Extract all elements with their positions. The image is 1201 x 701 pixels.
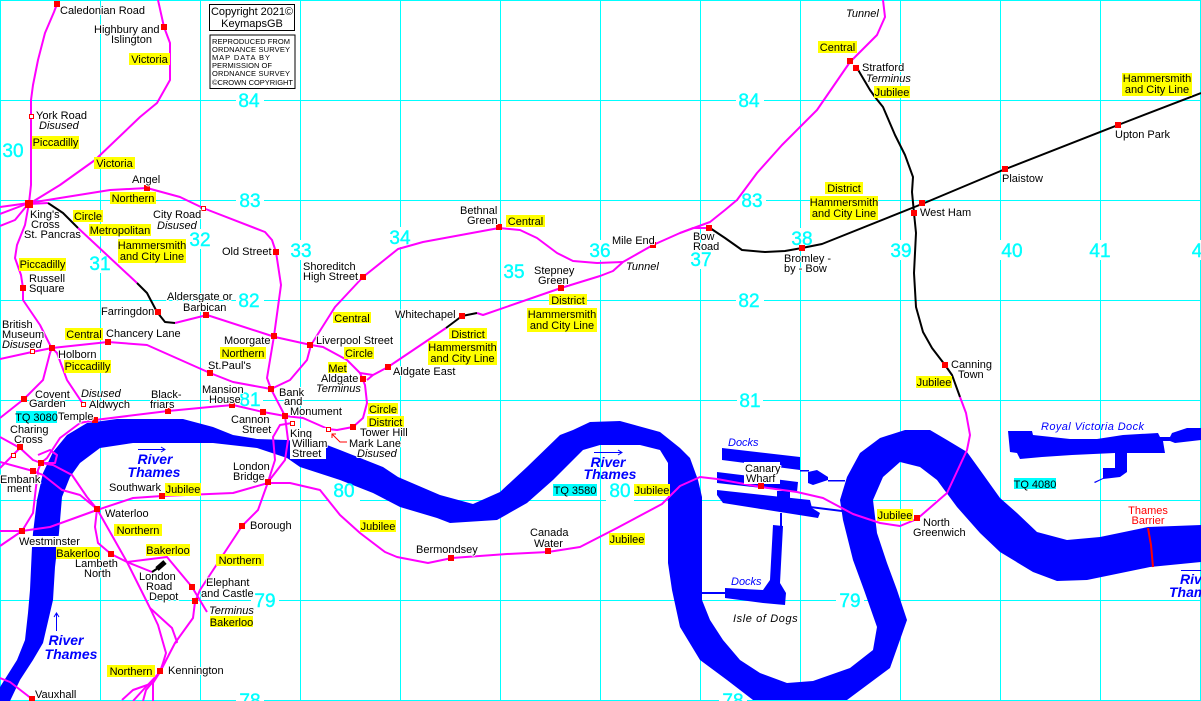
station: Highbury and Islington: [94, 24, 167, 46]
label: Royal Victoria Dock: Royal Victoria Dock: [1041, 421, 1144, 433]
line label: Jubilee: Jubilee: [917, 377, 951, 389]
line label: Hammersmith and City Line: and City Line: [812, 208, 876, 220]
station: Mansion House: [202, 384, 244, 408]
grid numbers: 83: [239, 191, 261, 212]
station: Elephant and Castle: [189, 577, 254, 617]
line label: Jubilee: Jubilee: [610, 534, 644, 546]
tube lines: black sections: [48, 68, 1201, 572]
station: Canning Town: Canning: [951, 359, 992, 371]
station: Aldersgate or Barbican: [167, 291, 233, 318]
line label: Bakerloo: Bakerloo: [146, 545, 190, 557]
grid numbers: 84: [238, 91, 260, 112]
ordnance survey credit: PERMISSION OF: [212, 61, 272, 70]
line label: Hammersmith and City Line: Hammersmith: [118, 240, 186, 252]
station: Elephant and Castle: Elephant: [206, 577, 249, 589]
line label: Jubilee: Jubilee: [875, 87, 909, 99]
station: Plaistow: Plaistow: [1002, 173, 1043, 185]
station: King's Cross St. Pancras: St. Pancras: [24, 229, 81, 241]
line label: Hammersmith and City Line: [428, 341, 497, 365]
station: Whitechapel: Whitechapel: [395, 309, 456, 321]
station: Aldwych: Disused: [81, 388, 122, 400]
label: Thames Barrier: Thames: [1128, 505, 1168, 517]
line label: Hammersmith and City Line: Hammersmith: [528, 309, 596, 321]
station: Bow Road: Road: [693, 241, 719, 253]
river label: River Thames 1: River: [137, 451, 174, 467]
river label: River Thames 3: Thames: [584, 466, 637, 482]
station: Russell Square: Square: [29, 283, 64, 295]
arrow: river flow east 3: [1181, 570, 1201, 572]
station: Stepney Green: [534, 265, 575, 291]
text: London Road Depot: Depot: [149, 591, 178, 603]
grid numbers: 31: [89, 254, 111, 275]
station: Bow Road: Bow: [693, 231, 714, 243]
station: Bethnal Green: Bethnal: [460, 205, 497, 217]
line label: Northern: Northern: [117, 525, 159, 537]
station: Holborn: Holborn: [58, 349, 97, 361]
station: Upton Park: [1115, 122, 1171, 141]
station: London Bridge: Bridge: [233, 471, 265, 483]
ordnance survey credit: ©CROWN COPYRIGHT: [212, 78, 293, 87]
station: London Bridge: [233, 461, 271, 485]
line label: Circle: Circle: [74, 211, 102, 223]
line label: Central: Central: [334, 313, 370, 325]
station: Aldersgate or Barbican: Aldersgate or: [167, 291, 233, 303]
text: London Road Depot: Road: [146, 581, 172, 593]
river label: River Thames 2: River: [48, 632, 85, 648]
station: Stepney Green: Green: [538, 275, 569, 287]
line label: Circle: Circle: [345, 348, 373, 360]
station: Bermondsey: Bermondsey: [416, 544, 478, 556]
station: Shoreditch High Street: [303, 261, 366, 283]
station: Aldersgate or Barbican: Barbican: [183, 302, 226, 314]
station: Bank and Monument: Monument: [290, 406, 342, 418]
grid numbers: 41: [1089, 241, 1111, 262]
line label: Central: Central: [820, 42, 855, 54]
station: disused marker: [12, 454, 16, 458]
grid numbers: 81: [739, 391, 761, 412]
station: Shoreditch High Street: High Street: [303, 271, 358, 283]
station: Canary Wharf: Wharf: [746, 473, 776, 485]
grid reference: TQ 4080: TQ 4080: [1014, 479, 1056, 491]
ordnance survey credit: MAP DATA BY: [212, 53, 270, 62]
station: Mansion House: Mansion: [202, 384, 244, 396]
river label: River Thames 2: Thames: [45, 646, 98, 662]
line label: Hammersmith and City Line: Hammersmith: [428, 342, 497, 354]
line label: Central: Central: [66, 329, 102, 341]
station: Stratford: Terminus: [866, 73, 911, 85]
station: Covent Garden: Covent: [35, 389, 70, 401]
ordnance survey credit: ORDNANCE SURVEY: [212, 69, 290, 78]
grid numbers: 33: [290, 241, 312, 262]
station: Embankment: ment: [7, 483, 31, 495]
line label: Hammersmith and City Line: and City Line: [530, 320, 594, 332]
station: Stepney Green: Stepney: [534, 265, 575, 277]
grid numbers: 37: [690, 250, 712, 271]
station: Tower Hill: [350, 424, 408, 439]
copyright box: Copyright 2021©: [211, 6, 293, 18]
grid numbers: 35: [503, 262, 525, 283]
station: Plaistow: [1002, 166, 1043, 185]
station: Caledonian Road: Caledonian Road: [60, 5, 145, 17]
station: York Road: York Road: [36, 110, 87, 122]
station: British Museum: Disused: [2, 339, 43, 351]
station: Aldwych: [81, 388, 130, 411]
label: Thames Barrier: Barrier: [1131, 515, 1165, 527]
station: Bethnal Green: Green: [467, 215, 498, 227]
station: Old Street: Old Street: [222, 246, 272, 258]
station: Blackfriars: Black-: [151, 389, 182, 401]
station: Lambeth North: North: [84, 568, 111, 580]
station: Tower Hill: Tower Hill: [360, 427, 408, 439]
station: Bank and Monument: Bank: [279, 387, 305, 399]
station: King's Cross St. Pancras: King's: [30, 209, 60, 221]
station: King's Cross St. Pancras: Cross: [31, 219, 60, 231]
station: Lambeth North: [75, 551, 118, 580]
station: Charing Cross: Charing: [10, 424, 49, 436]
copyright box: KeymapsGB: [221, 18, 283, 30]
station: West Ham: West Ham: [920, 207, 971, 219]
grid numbers: 40: [1001, 241, 1023, 262]
line label: Hammersmith and City Line: [118, 239, 186, 263]
line label: District: District: [451, 329, 485, 341]
station: Embankment: [0, 460, 44, 495]
grid numbers: 34: [389, 228, 411, 249]
station: British Museum: [2, 319, 44, 354]
line label: Circle: Circle: [369, 404, 397, 416]
river label: River Thames 3: River: [590, 454, 627, 470]
station: North Greenwich: North: [923, 517, 950, 529]
line label: Hammersmith and City Line: Hammersmith: [810, 197, 878, 209]
note: Tunnel north: Tunnel: [846, 8, 879, 20]
line label: Victoria: Victoria: [131, 54, 169, 66]
station: York Road: [30, 110, 87, 132]
station: Bromley-by-Bow: [784, 245, 831, 275]
station: Canada Water: Canada: [530, 527, 569, 539]
station: Canada Water: [530, 527, 569, 554]
station: North Greenwich: [913, 515, 966, 539]
line label: Hammersmith and City Line: Hammersmith: [1123, 73, 1191, 85]
station: Covent Garden: [21, 389, 70, 410]
dock: Royal Victoria Dock: [1008, 428, 1201, 483]
station: Westminster: [19, 528, 81, 548]
line label: District: District: [827, 183, 861, 195]
station: Aldgate: Aldgate: [321, 373, 358, 385]
station: Bethnal Green: [460, 205, 502, 230]
line label: District: District: [369, 417, 402, 429]
station: Liverpool Street: Liverpool Street: [316, 335, 393, 347]
station: Highbury and Islington: Islington: [111, 34, 152, 46]
line label: Northern: Northern: [110, 666, 152, 678]
line label: District: District: [551, 295, 585, 307]
line label: Jubilee: Jubilee: [166, 484, 200, 496]
grid numbers: 84: [738, 91, 760, 112]
station: Aldgate East: Aldgate East: [393, 366, 455, 378]
station: City Road: Disused: [157, 220, 198, 232]
station: York Road: Disused: [39, 120, 80, 132]
station: Bank and Monument: [268, 386, 342, 419]
station: Covent Garden: Garden: [29, 398, 66, 410]
station: Borough: Borough: [250, 520, 292, 532]
station: Elephant and Castle: and Castle: [201, 588, 254, 600]
station: Angel: Angel: [132, 174, 160, 186]
note: Tunnel Mile End: Tunnel: [626, 261, 659, 273]
line label: Piccadilly: Piccadilly: [65, 361, 111, 373]
line label: Hammersmith and City Line: and City Line: [1125, 84, 1189, 96]
line label: Northern: Northern: [222, 348, 264, 360]
ordnance survey credit: REPRODUCED FROM: [212, 37, 290, 46]
station: King William Street: Street: [292, 448, 321, 460]
station: Temple: Temple: [58, 411, 93, 423]
station: Vauxhall: Vauxhall: [35, 689, 76, 701]
grid numbers: 80: [333, 481, 355, 502]
station: North Greenwich: Greenwich: [913, 527, 966, 539]
station: Russell Square: [20, 273, 65, 295]
line label: Northern: Northern: [219, 555, 261, 567]
station: City Road: City Road: [153, 209, 201, 221]
grid numbers: 30: [2, 141, 24, 162]
line label: Northern: Northern: [112, 193, 154, 205]
grid numbers: 36: [589, 241, 611, 262]
station: Mark Lane: Disused: [357, 448, 398, 460]
grid numbers: 32: [189, 230, 211, 251]
grid numbers: 83: [741, 191, 763, 212]
river label: River Thames 4: [1169, 571, 1201, 600]
station: Southwark: Southwark: [109, 482, 161, 494]
station: Aldwych: Aldwych: [89, 399, 130, 411]
station: London Bridge: London: [233, 461, 270, 473]
station: King William Street: King: [290, 428, 312, 440]
line label: Hammersmith and City Line: and City Line: [430, 353, 495, 365]
station: Elephant and Castle: Terminus: [209, 605, 254, 617]
line label: Bakerloo: Bakerloo: [210, 617, 253, 629]
line label: Hammersmith and City Line: [810, 196, 878, 220]
line label: Piccadilly: Piccadilly: [20, 259, 66, 271]
line label: Hammersmith and City Line: and City Line: [120, 251, 184, 263]
label: Docks: Docks: [728, 437, 759, 449]
line label: Bakerloo: Bakerloo: [56, 548, 100, 560]
station: British Museum: British: [2, 319, 33, 331]
arrow: Mark Lane pointer: [332, 434, 347, 442]
station: Cannon Street: [231, 409, 271, 436]
station: Canary Wharf: Canary: [745, 463, 781, 475]
station: St Paul's: St.Paul's: [208, 360, 252, 372]
text: London Road Depot: [139, 571, 178, 603]
ordnance survey credit: [210, 35, 295, 88]
station: Aldgate: Terminus: [316, 383, 361, 395]
station: Russell Square: Russell: [29, 273, 65, 285]
station: City Road: [153, 206, 206, 232]
station: Embankment: Embank: [0, 474, 41, 486]
text: London Road Depot: London: [139, 571, 176, 583]
line label: Jubilee: Jubilee: [361, 521, 395, 533]
station: Chancery Lane: Chancery Lane: [106, 328, 181, 340]
thames barrier: [1148, 528, 1153, 567]
station: British Museum: Museum: [2, 329, 44, 341]
station: Farringdon: Farringdon: [101, 306, 154, 318]
station: Canada Water: Water: [534, 538, 563, 550]
line label: Piccadilly: Piccadilly: [33, 137, 79, 149]
line label: Victoria: Victoria: [96, 158, 134, 170]
station: Chancery Lane: [105, 328, 181, 345]
station: West Ham: [911, 200, 971, 219]
river label: River Thames 1: [128, 451, 181, 480]
station: Stratford: [847, 58, 911, 85]
station: Westminster: Westminster: [19, 536, 80, 548]
river: Thames: [0, 419, 1201, 701]
arrow: river flow east 2: [594, 450, 622, 455]
station: Canning Town: [942, 359, 992, 381]
copyright box: [210, 4, 294, 30]
station: Southwark: [109, 482, 165, 499]
station: Shoreditch High Street: Shoreditch: [303, 261, 356, 273]
ordnance survey credit: ORDNANCE SURVEY: [212, 45, 290, 54]
arrow: river flow east: [138, 447, 165, 452]
line label: Met: Met: [328, 363, 347, 375]
station: Waterloo: [94, 506, 149, 520]
station: Highbury and Islington: Highbury and: [94, 24, 159, 36]
text: Isle of Dogs: Isle of Dogs: [733, 613, 798, 625]
station: Mansion House: House: [209, 394, 241, 406]
station: Canning Town: Town: [958, 369, 984, 381]
station: Cannon Street: Street: [242, 424, 271, 436]
station: Upton Park: Upton Park: [1115, 129, 1171, 141]
label: Docks: Docks: [731, 576, 762, 588]
line label: Central: Central: [508, 216, 543, 228]
grid numbers: 82: [738, 291, 760, 312]
grid numbers: 80: [609, 481, 631, 502]
station: Blackfriars: [150, 389, 182, 414]
line label: Metropolitan: Metropolitan: [90, 225, 150, 237]
station: Bank and Monument: and: [284, 396, 302, 408]
station: King William Street: William: [292, 438, 327, 450]
arrow: river flow north: [54, 613, 59, 631]
station: King's Cross St. Pancras: [24, 200, 81, 241]
station: Charing Cross: Cross: [14, 434, 43, 446]
grid numbers: 39: [890, 241, 912, 262]
station: Stratford: Stratford: [862, 62, 904, 74]
river label: River Thames 2: [45, 632, 98, 662]
grid numbers: 38: [791, 229, 813, 250]
line label: Hammersmith and City Line: [1122, 73, 1192, 96]
river label: River Thames 3: [584, 454, 637, 482]
station: Mark Lane: Mark Lane: [349, 438, 401, 450]
station: Bow Road: [693, 225, 719, 253]
grid numbers: 79: [254, 591, 276, 612]
station: Waterloo: Waterloo: [105, 508, 149, 520]
river label: River Thames 1: Thames: [128, 464, 181, 480]
station: Mark Lane: [326, 428, 401, 460]
station: Moorgate: Moorgate: [224, 335, 270, 347]
station: Bromley-by-Bow: by - Bow: [784, 263, 827, 275]
line label: Jubilee: Jubilee: [878, 510, 912, 522]
station: King William Street: [290, 422, 327, 460]
line label: Hammersmith and City Line: [527, 308, 597, 332]
station: Bromley-by-Bow: Bromley -: [784, 253, 831, 265]
grid numbers: 82: [238, 291, 260, 312]
grid reference: TQ 3080: TQ 3080: [15, 412, 58, 424]
station: Charing Cross: [10, 424, 49, 450]
depot siding: [157, 562, 165, 569]
grid reference: TQ 3580: TQ 3580: [554, 485, 596, 497]
station: Kennington: Kennington: [168, 665, 224, 677]
station: Aldgate: [316, 373, 366, 395]
line label: Jubilee: Jubilee: [635, 485, 669, 497]
station: Holborn: [49, 345, 97, 361]
station: Blackfriars: friars: [150, 399, 175, 411]
station: Cannon Street: Cannon: [231, 414, 270, 426]
grid numbers: 81: [239, 390, 261, 411]
station: Mile End: Mile End: [612, 235, 655, 247]
grid numbers: 79: [839, 591, 861, 612]
docks: West India and Millwall: [702, 448, 845, 605]
station: Canary Wharf: [744, 462, 781, 489]
station: Lambeth North: Lambeth: [75, 558, 118, 570]
label: Thames Barrier: [1128, 505, 1168, 527]
